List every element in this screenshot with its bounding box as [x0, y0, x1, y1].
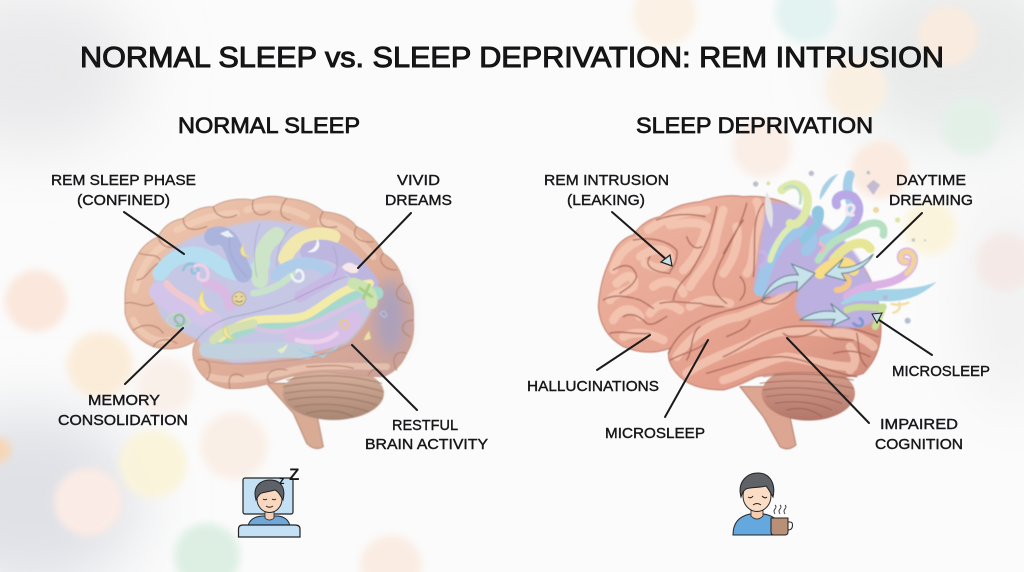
label: restful brain activity	[352, 345, 488, 453]
label: REM sleep phase (confined)	[51, 172, 196, 254]
label: hallucinations	[527, 335, 659, 395]
heading: normal sleep: NORMAL SLEEP	[178, 113, 360, 138]
label: daytime dreaming: DREAMING	[889, 192, 973, 209]
icon: sleeping person	[238, 465, 300, 537]
panel: sleep deprivation	[527, 113, 990, 535]
illustration: brain with leaking REM swirls	[598, 171, 937, 449]
label: microsleep (right)	[872, 313, 990, 380]
label: restful brain activity: RESTFUL	[392, 417, 458, 434]
title: NORMAL SLEEP vs. SLEEP DEPRIVATION: REM INTRUSION	[80, 42, 944, 74]
label: memory consolidation: MEMORY	[88, 392, 160, 409]
icon: tired person with coffee	[733, 473, 792, 535]
label: vivid dreams: DREAMS	[385, 192, 452, 209]
label: microsleep (lower)	[605, 340, 708, 442]
label: impaired cognition	[787, 338, 963, 453]
label: vivid dreams	[358, 172, 452, 268]
label: vivid dreams: VIVID	[397, 172, 440, 189]
label: memory consolidation: CONSOLIDATION	[58, 412, 188, 429]
illustration: calm pastel brain	[125, 196, 414, 449]
label: daytime dreaming: DAYTIME	[896, 172, 966, 189]
label: impaired cognition: COGNITION	[875, 436, 963, 453]
icon: sleeping person: z	[279, 475, 285, 487]
icon: sleeping person: Z	[289, 465, 299, 484]
panel: normal sleep	[51, 113, 488, 537]
label: daytime dreaming	[877, 172, 973, 257]
label: microsleep (right): MICROSLEEP	[892, 363, 990, 380]
label: hallucinations: HALLUCINATIONS	[527, 378, 659, 395]
label: REM intrusion (leaking): REM INTRUSION	[544, 172, 669, 189]
heading: sleep deprivation: SLEEP DEPRIVATION	[636, 113, 873, 138]
label: impaired cognition: IMPAIRED	[880, 416, 958, 433]
label: REM sleep phase (confined): (CONFINED)	[77, 192, 170, 209]
label: REM intrusion (leaking): (LEAKING)	[567, 192, 645, 209]
label: microsleep (lower): MICROSLEEP	[605, 425, 705, 442]
label: REM sleep phase (confined): REM SLEEP PHASE	[51, 172, 196, 189]
label: memory consolidation	[58, 328, 188, 429]
label: restful brain activity: BRAIN ACTIVITY	[365, 436, 488, 453]
label: REM intrusion (leaking)	[544, 172, 672, 266]
